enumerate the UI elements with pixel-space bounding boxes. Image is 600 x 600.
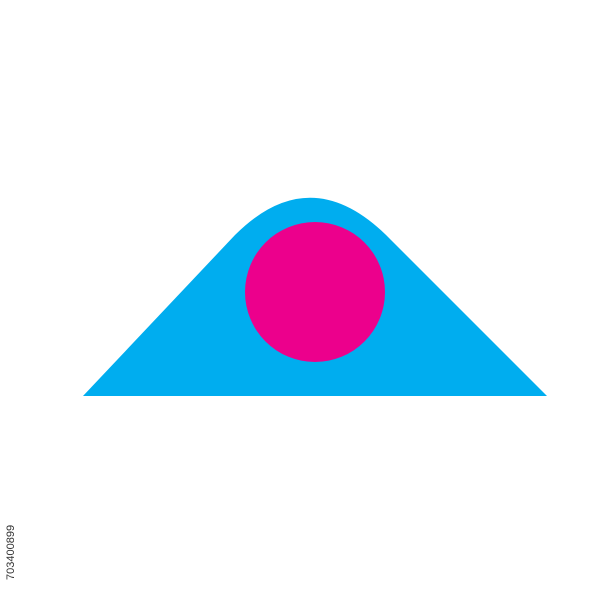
text: stock id: 703400899 [5,525,17,580]
shape: blue mound [83,198,547,396]
shape: pink circle [245,222,385,362]
